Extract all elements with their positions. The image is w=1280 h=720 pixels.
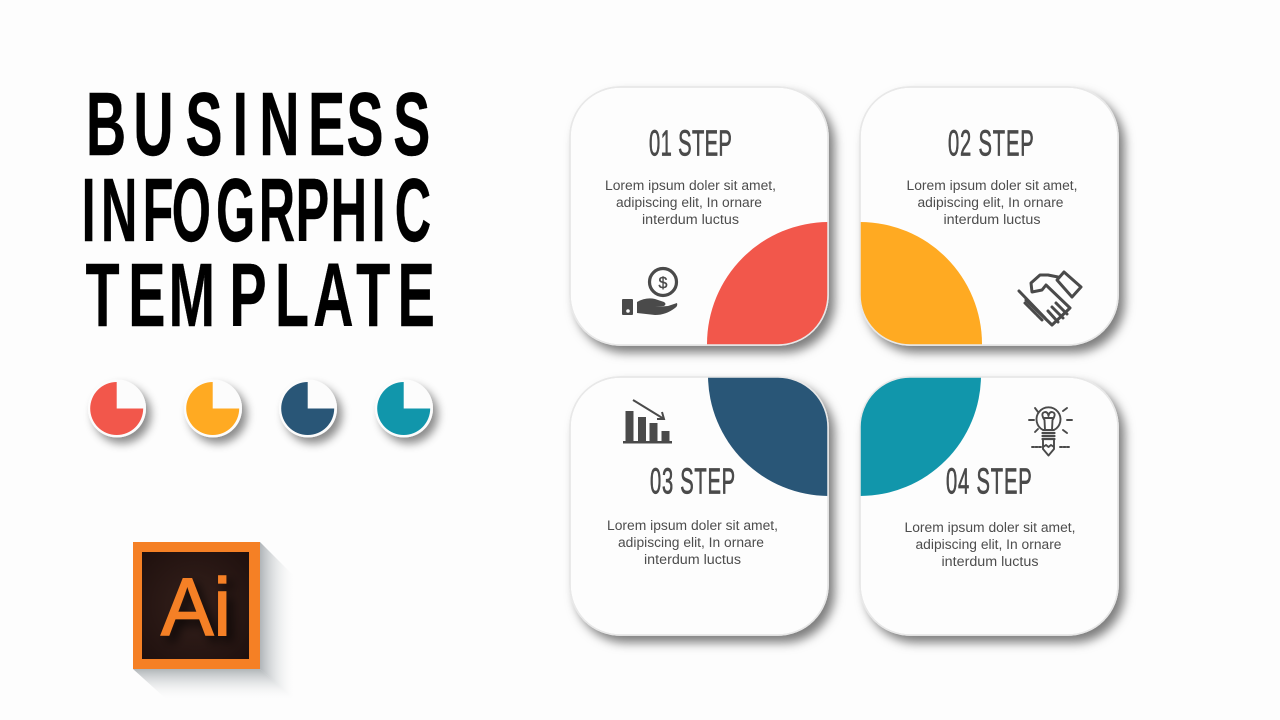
card rim [570, 377, 828, 635]
body text: interdum luctus [642, 212, 739, 227]
card base [860, 377, 1118, 635]
pie marker: teal [375, 380, 433, 438]
teal corner wedge [860, 378, 981, 496]
panel: step 2 [858, 86, 1132, 360]
heading: 01 STEP [649, 125, 732, 164]
logo letters: Ai [161, 562, 231, 653]
heading: 04 STEP [946, 463, 1032, 502]
body text: adipiscing elit, In ornare [918, 195, 1064, 210]
card base [570, 87, 828, 345]
card rim [860, 87, 1118, 345]
title [82, 73, 435, 345]
icon: hand with coin: $ [659, 275, 668, 292]
panel: step 4 [858, 376, 1132, 650]
title line: INFOGRPHIC: INFOGRPHIC [82, 161, 431, 261]
panel: step 1 [568, 86, 842, 360]
icon: hand with coin [622, 268, 677, 315]
logo frame [133, 542, 260, 669]
pie marker: orange [184, 380, 242, 438]
body text: Lorem ipsum doler sit amet, [904, 520, 1076, 535]
body text [607, 518, 778, 567]
long shadow [133, 542, 293, 698]
body text: Lorem ipsum doler sit amet, [906, 178, 1078, 193]
card base [570, 377, 828, 635]
body text: interdum luctus [942, 554, 1039, 569]
card rim [860, 377, 1118, 635]
body text: adipiscing elit, In ornare [916, 537, 1062, 552]
pie marker: navy [279, 380, 337, 438]
body text [605, 178, 776, 227]
body text [904, 520, 1076, 569]
panel: step 3 [568, 376, 842, 650]
body text: interdum luctus [944, 212, 1041, 227]
card rim [570, 87, 828, 345]
body text [906, 178, 1078, 227]
heading: 03 STEP [650, 463, 735, 502]
navy corner wedge [708, 378, 828, 496]
icon: falling bar chart [623, 400, 672, 444]
body text: interdum luctus [644, 552, 741, 567]
icon: handshake [1019, 272, 1081, 325]
logo inner square [142, 552, 249, 659]
pie marker: red [88, 380, 146, 438]
card base [860, 87, 1118, 345]
orange corner wedge [860, 222, 982, 344]
Adobe Illustrator logo [133, 542, 293, 698]
red corner wedge [707, 222, 828, 344]
body text: Lorem ipsum doler sit amet, [605, 178, 776, 193]
body text: Lorem ipsum doler sit amet, [607, 518, 778, 533]
title line: BUSINESS: BUSINESS [86, 73, 430, 174]
body text: adipiscing elit, In ornare [618, 535, 764, 550]
heading: 02 STEP [948, 125, 1034, 164]
title line: TEMPLATE: TEMPLATE [86, 244, 435, 345]
body text: adipiscing elit, In ornare [616, 195, 762, 210]
icon: light bulb pencil [1029, 407, 1072, 456]
colour pie markers [88, 380, 433, 438]
